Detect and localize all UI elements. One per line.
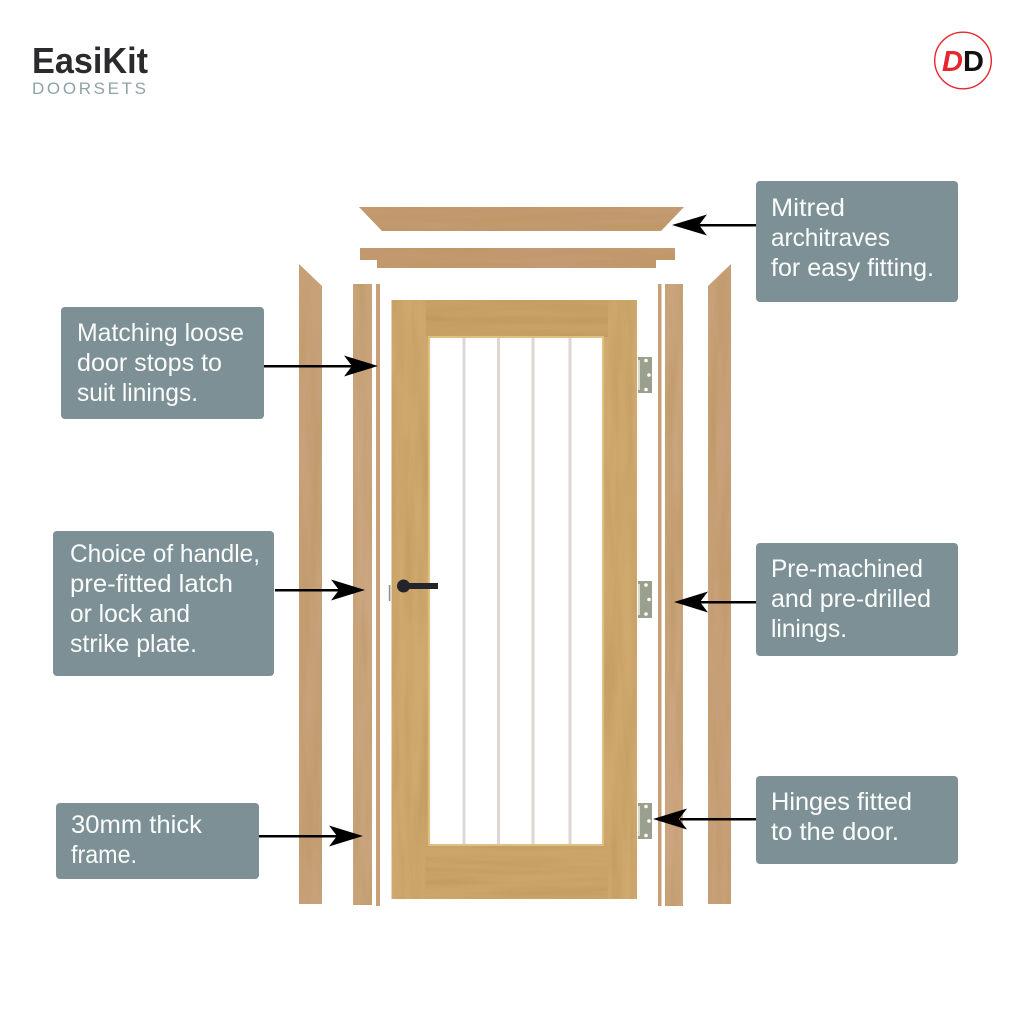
left loose door stop (376, 284, 380, 906)
logo: DD badge: D (963, 46, 984, 78)
logo: DD badge (935, 32, 991, 89)
callout: handle and latch (53, 531, 274, 676)
oak door with glazed panel (392, 300, 637, 899)
callout: door stops: Matching loose (77, 319, 244, 347)
callout: thick frame: 30mm thick (71, 811, 203, 839)
middle hinge (638, 581, 652, 618)
left lining (353, 284, 372, 905)
callout: handle and latch: pre-fitted latch (70, 570, 233, 598)
top door lining head (360, 248, 675, 268)
callout: hinges (756, 776, 958, 864)
arrow: to architrave (672, 214, 756, 236)
arrow: to latch side (275, 580, 365, 600)
right mitred architrave (708, 264, 731, 904)
right loose door stop (658, 284, 662, 906)
callout: door stops: suit linings. (77, 379, 198, 407)
callout: mitred architraves: architraves (771, 224, 890, 252)
callout: door stops: door stops to (77, 349, 222, 377)
callout: mitred architraves: Mitred (771, 194, 845, 222)
bottom hinge (638, 803, 652, 839)
callout: thick frame: frame. (71, 841, 137, 869)
callout: hinges: Hinges fitted (771, 788, 912, 816)
callout: door stops (61, 307, 264, 419)
callout: handle and latch: or lock and (70, 600, 190, 628)
arrow: to hinge (653, 808, 756, 830)
callout: pre-machined linings: Pre-machined (771, 555, 923, 583)
logo: DD badge: D (942, 46, 963, 78)
callout: mitred architraves (756, 181, 958, 302)
callout: pre-machined linings (756, 543, 958, 656)
arrow: to frame (259, 826, 363, 846)
callout: hinges: to the door. (771, 818, 899, 846)
callout: pre-machined linings: and pre-drilled (771, 585, 931, 613)
callout: handle and latch: strike plate. (70, 630, 197, 658)
arrow: to door stop (264, 356, 378, 376)
top hinge (638, 357, 652, 393)
logo: EasiKit Doorsets (32, 40, 148, 98)
callout: mitred architraves: for easy fitting. (771, 254, 934, 282)
arrow: to linings (674, 592, 756, 612)
top mitred architrave (359, 207, 684, 231)
logo: EasiKit Doorsets: DOORSETS (32, 79, 146, 98)
door handle and latch (389, 580, 438, 601)
left mitred architrave (299, 264, 322, 904)
callout: thick frame (56, 803, 259, 879)
logo: EasiKit Doorsets: EasiKit (32, 40, 148, 81)
right lining (665, 284, 683, 906)
callout: pre-machined linings: linings. (771, 615, 847, 643)
callout: handle and latch: Choice of handle, (70, 540, 260, 568)
